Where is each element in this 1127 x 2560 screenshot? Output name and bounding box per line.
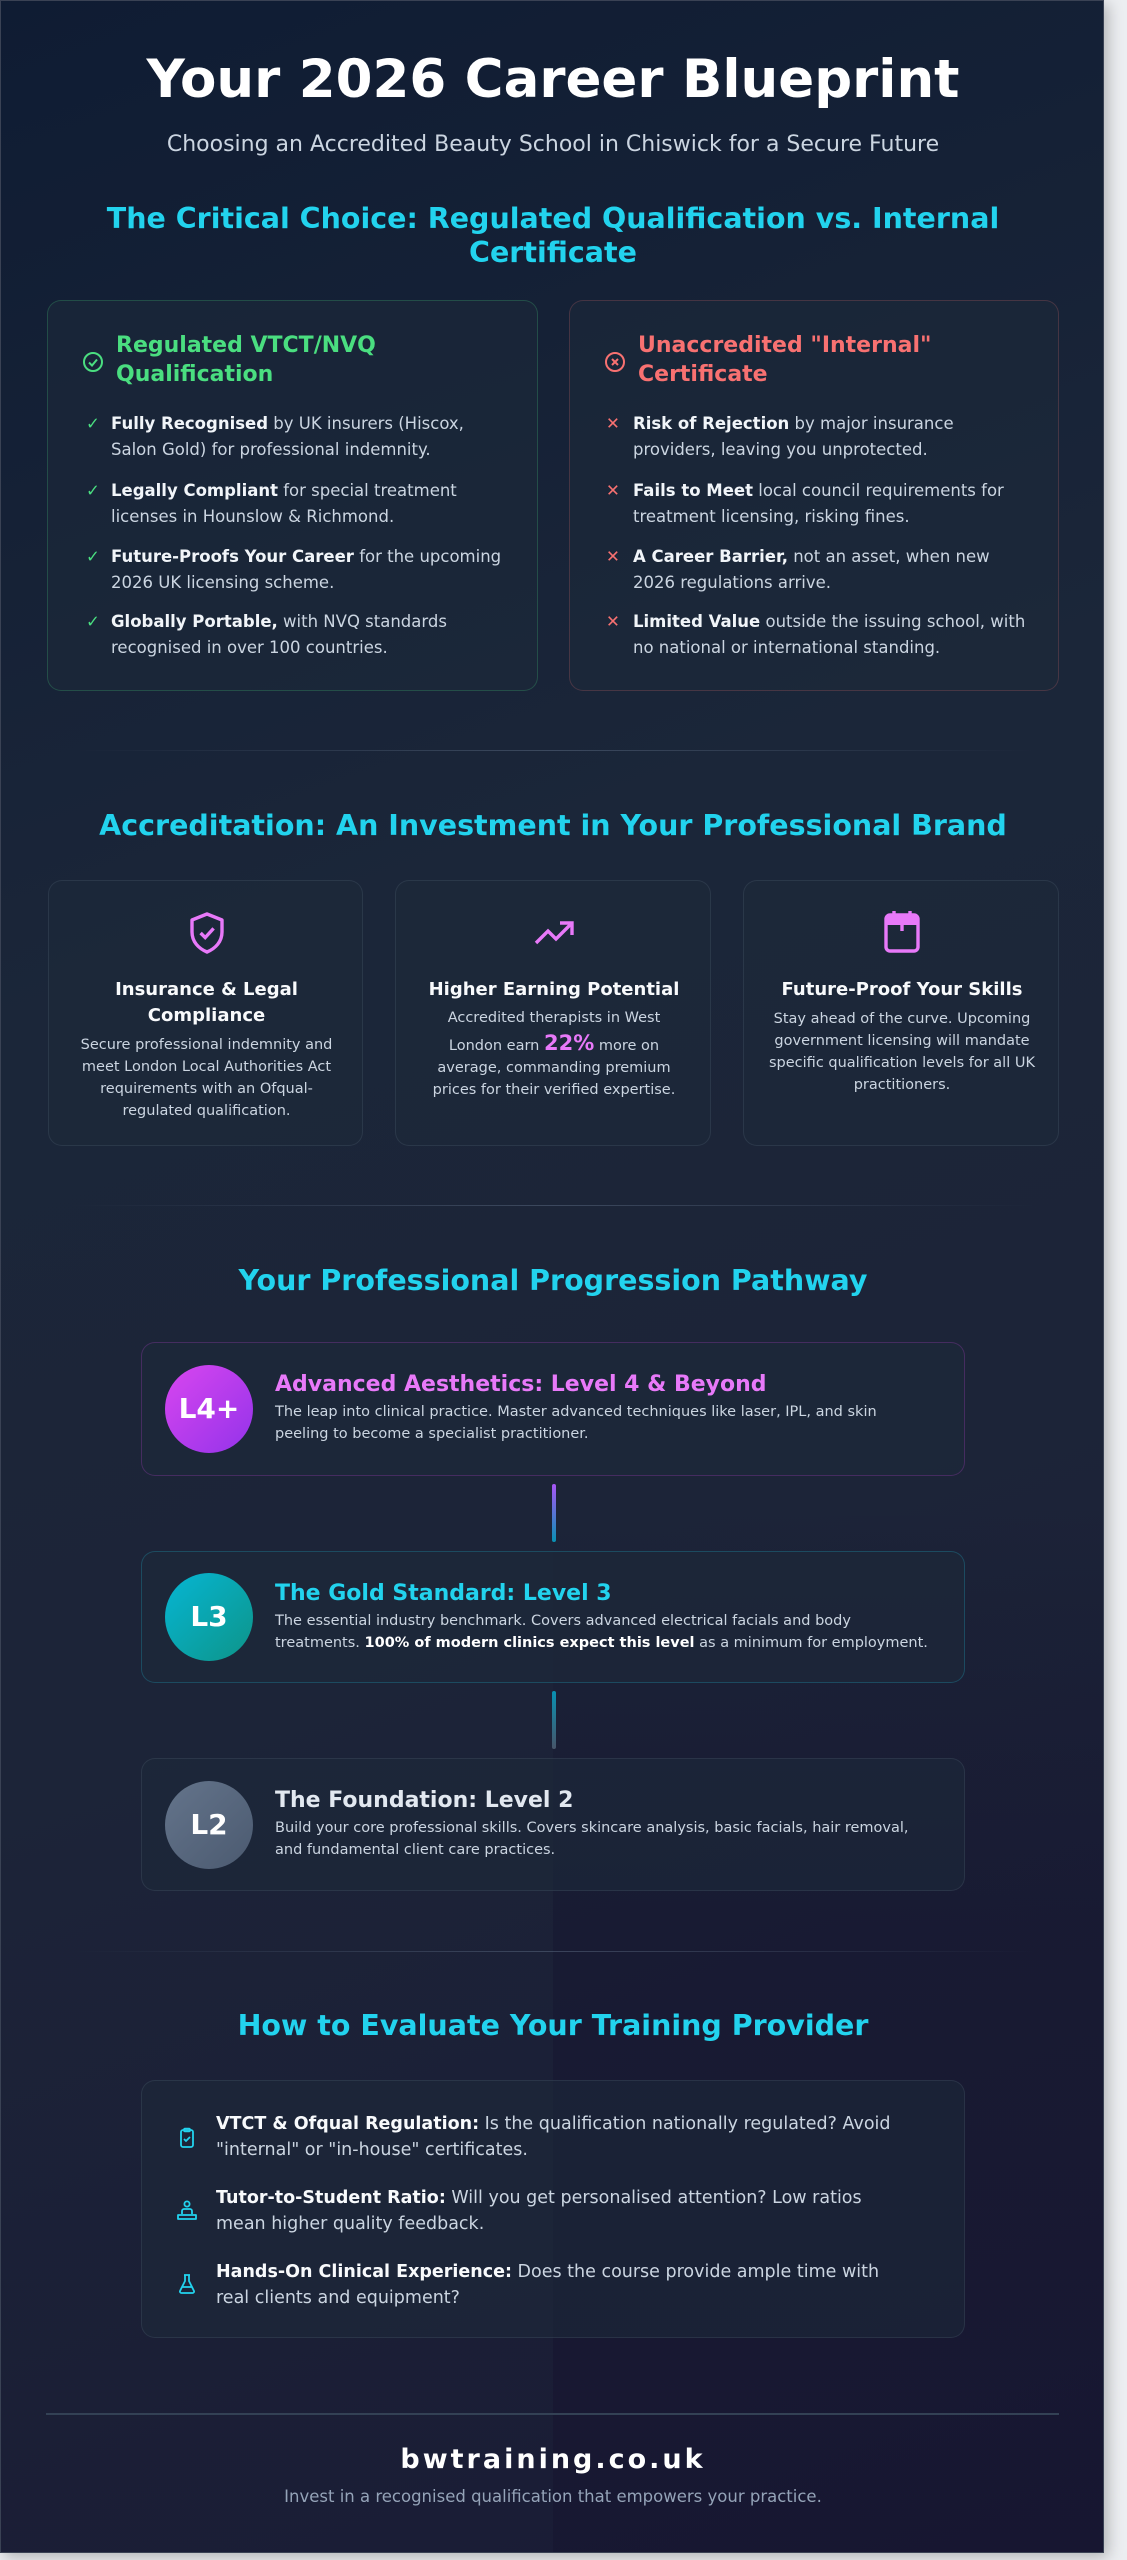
subtitle: Choosing an Accredited Beauty School in Chiswick for a Secure Future xyxy=(167,132,939,157)
text: regulation xyxy=(216,2114,890,2160)
icon: x circle xyxy=(605,352,625,372)
panel: level 2 xyxy=(141,1758,965,1891)
title: Your 2026 Career Blueprint xyxy=(146,49,960,110)
text: level 4: peeling to become a specialist practitioner. xyxy=(275,1426,589,1442)
text: ratio: Tutor-to-Student Ratio: Will you get personalised attention? Low ratios xyxy=(216,2188,862,2208)
heading: critical choice: The Critical Choice: Regulated Qualification vs. Internal xyxy=(107,202,999,235)
icon: clipboard xyxy=(180,2128,194,2148)
text: level 2: The Foundation: Level 2 xyxy=(275,1788,573,1813)
heading: unaccredited: Certificate xyxy=(638,362,768,387)
text: clinical xyxy=(216,2262,879,2308)
list: benefits: ✓ xyxy=(86,612,100,631)
list: risks xyxy=(606,414,1025,657)
panel: future-proof xyxy=(743,880,1059,1146)
list: risks: Risk of Rejection by major insurance xyxy=(633,414,954,433)
list: risks: 2026 regulations arrive. xyxy=(633,573,831,592)
list: risks: A Career Barrier, not an asset, when new xyxy=(633,547,990,566)
list: risks: Limited Value outside the issuing school, with xyxy=(633,612,1025,631)
badge: L4+: L4+ xyxy=(179,1392,239,1425)
heading: progression: Your Professional Progression Pathway xyxy=(239,1264,867,1297)
icon: calendar xyxy=(884,911,920,953)
icon: tutor xyxy=(177,2200,197,2220)
text: clinical: Hands-On Clinical Experience: Does the course provide ample time with xyxy=(216,2262,879,2282)
panel: insurance & legal xyxy=(48,880,363,1146)
list: benefits: Salon Gold) for professional indemnity. xyxy=(111,440,431,459)
text: future-proof: specific qualification levels for all UK xyxy=(769,1055,1035,1071)
text: earning: average, commanding premium xyxy=(437,1060,671,1076)
list: benefits: recognised in over 100 countries. xyxy=(111,638,388,657)
panel: evaluation checklist xyxy=(141,2080,965,2338)
list: benefits: ✓ xyxy=(86,414,100,433)
panel: higher earning xyxy=(395,880,711,1146)
text: insurance: regulated qualification. xyxy=(122,1103,290,1119)
text: level 2 xyxy=(275,1788,909,1858)
text: level 2: Build your core professional skills. Covers skincare analysis, basic facials, hair removal, xyxy=(275,1820,909,1836)
badge: L3 xyxy=(165,1573,253,1661)
text: insurance: meet London Local Authorities Act xyxy=(82,1059,331,1075)
text: level 3: treatments. 100% of modern clinics expect this level as a minimum for employment. xyxy=(275,1635,928,1651)
list: risks: ✕ xyxy=(606,547,620,566)
heading: accreditation: Accreditation: An Investment in Your Professional Brand xyxy=(99,809,1007,842)
arrow: connector 3 to 2 xyxy=(552,1691,556,1749)
panel: unaccredited certificate xyxy=(569,300,1059,691)
icon: flask xyxy=(179,2274,195,2294)
text: level 4: Advanced Aesthetics: Level 4 & Beyond xyxy=(275,1372,767,1397)
heading: regulated xyxy=(116,333,376,387)
heading: unaccredited: Unaccredited "Internal" xyxy=(638,333,931,358)
list: risks: ✕ xyxy=(606,414,620,433)
text: earning: prices for their verified expertise. xyxy=(433,1082,675,1098)
icon: shield xyxy=(190,912,224,954)
text: insurance: Insurance & Legal xyxy=(115,979,298,1000)
text: level 4: The leap into clinical practice. Master advanced techniques like laser, IPL, and skin xyxy=(275,1404,877,1420)
text: earning: Accredited therapists in West xyxy=(448,1010,660,1026)
list: benefits: Globally Portable, with NVQ standards xyxy=(111,612,447,631)
badge: L2 xyxy=(165,1781,253,1869)
text: insurance: Secure professional indemnity and xyxy=(81,1037,332,1053)
icon: trending up xyxy=(534,921,574,944)
text: earning: Higher Earning Potential xyxy=(429,979,679,1000)
badge: L3: L3 xyxy=(190,1600,228,1633)
list: benefits: 2026 UK licensing scheme. xyxy=(111,573,334,592)
list: risks: Fails to Meet local council requirements for xyxy=(633,481,1004,500)
text: future-proof xyxy=(769,979,1036,1093)
list: benefits xyxy=(86,414,501,657)
text: level 3: The Gold Standard: Level 3 xyxy=(275,1581,612,1606)
text: level 3 xyxy=(274,1581,928,1651)
badge: L2: L2 xyxy=(190,1808,228,1841)
text: future-proof: Stay ahead of the curve. Upcoming xyxy=(774,1011,1030,1027)
list: benefits: licenses in Hounslow & Richmond. xyxy=(111,507,394,526)
list: risks: ✕ xyxy=(606,481,620,500)
heading: unaccredited xyxy=(638,333,931,387)
text: earning xyxy=(429,979,679,1098)
footer: website: bwtraining.co.uk xyxy=(400,2444,706,2475)
text: future-proof: government licensing will mandate xyxy=(774,1033,1030,1049)
text: regulation: "internal" or "in-house" certificates. xyxy=(216,2140,528,2160)
text: insurance: Compliance xyxy=(148,1005,265,1026)
text: ratio xyxy=(216,2188,862,2234)
text: level 3: The essential industry benchmark. Covers advanced electrical facials and body xyxy=(275,1613,851,1629)
heading: critical choice xyxy=(106,202,999,269)
text: level 4 xyxy=(274,1372,877,1442)
heading: evaluate: How to Evaluate Your Training Provider xyxy=(238,2009,868,2042)
badge: L4+ xyxy=(165,1365,253,1453)
text: regulation: VTCT & Ofqual Regulation: Is the qualification nationally regulated? Avoid xyxy=(216,2114,890,2134)
list: benefits: ✓ xyxy=(86,481,100,500)
heading: regulated: Qualification xyxy=(116,362,273,387)
arrow: connector 4 to 3 xyxy=(552,1484,556,1542)
list: risks: ✕ xyxy=(606,612,620,631)
footer: tagline: Invest in a recognised qualification that empowers your practice. xyxy=(284,2487,822,2506)
text: earning: London earn 22% more on xyxy=(449,1031,659,1055)
text: insurance xyxy=(81,979,332,1119)
panel: level 3 xyxy=(141,1551,965,1683)
list: benefits: Fully Recognised by UK insurers (Hiscox, xyxy=(111,414,464,433)
list: risks: no national or international standing. xyxy=(633,638,940,657)
text: ratio: mean higher quality feedback. xyxy=(216,2214,484,2234)
list: risks: providers, leaving you unprotected. xyxy=(633,440,928,459)
text: future-proof: practitioners. xyxy=(854,1077,950,1093)
text: level 2: and fundamental client care practices. xyxy=(275,1842,555,1858)
text: future-proof: Future-Proof Your Skills xyxy=(782,979,1022,1000)
icon: check circle xyxy=(83,352,103,372)
list: risks: treatment licensing, risking fines. xyxy=(633,507,910,526)
list: benefits: Legally Compliant for special treatment xyxy=(111,481,457,500)
text: clinical: real clients and equipment? xyxy=(216,2288,460,2308)
list: benefits: ✓ xyxy=(86,547,100,566)
panel: level 4 xyxy=(141,1342,965,1476)
heading: critical choice: Certificate xyxy=(469,236,637,269)
panel: regulated qualification xyxy=(47,300,538,691)
heading: regulated: Regulated VTCT/NVQ xyxy=(116,333,376,358)
text: insurance: requirements with an Ofqual- xyxy=(100,1081,313,1097)
list: benefits: Future-Proofs Your Career for the upcoming xyxy=(111,547,501,566)
